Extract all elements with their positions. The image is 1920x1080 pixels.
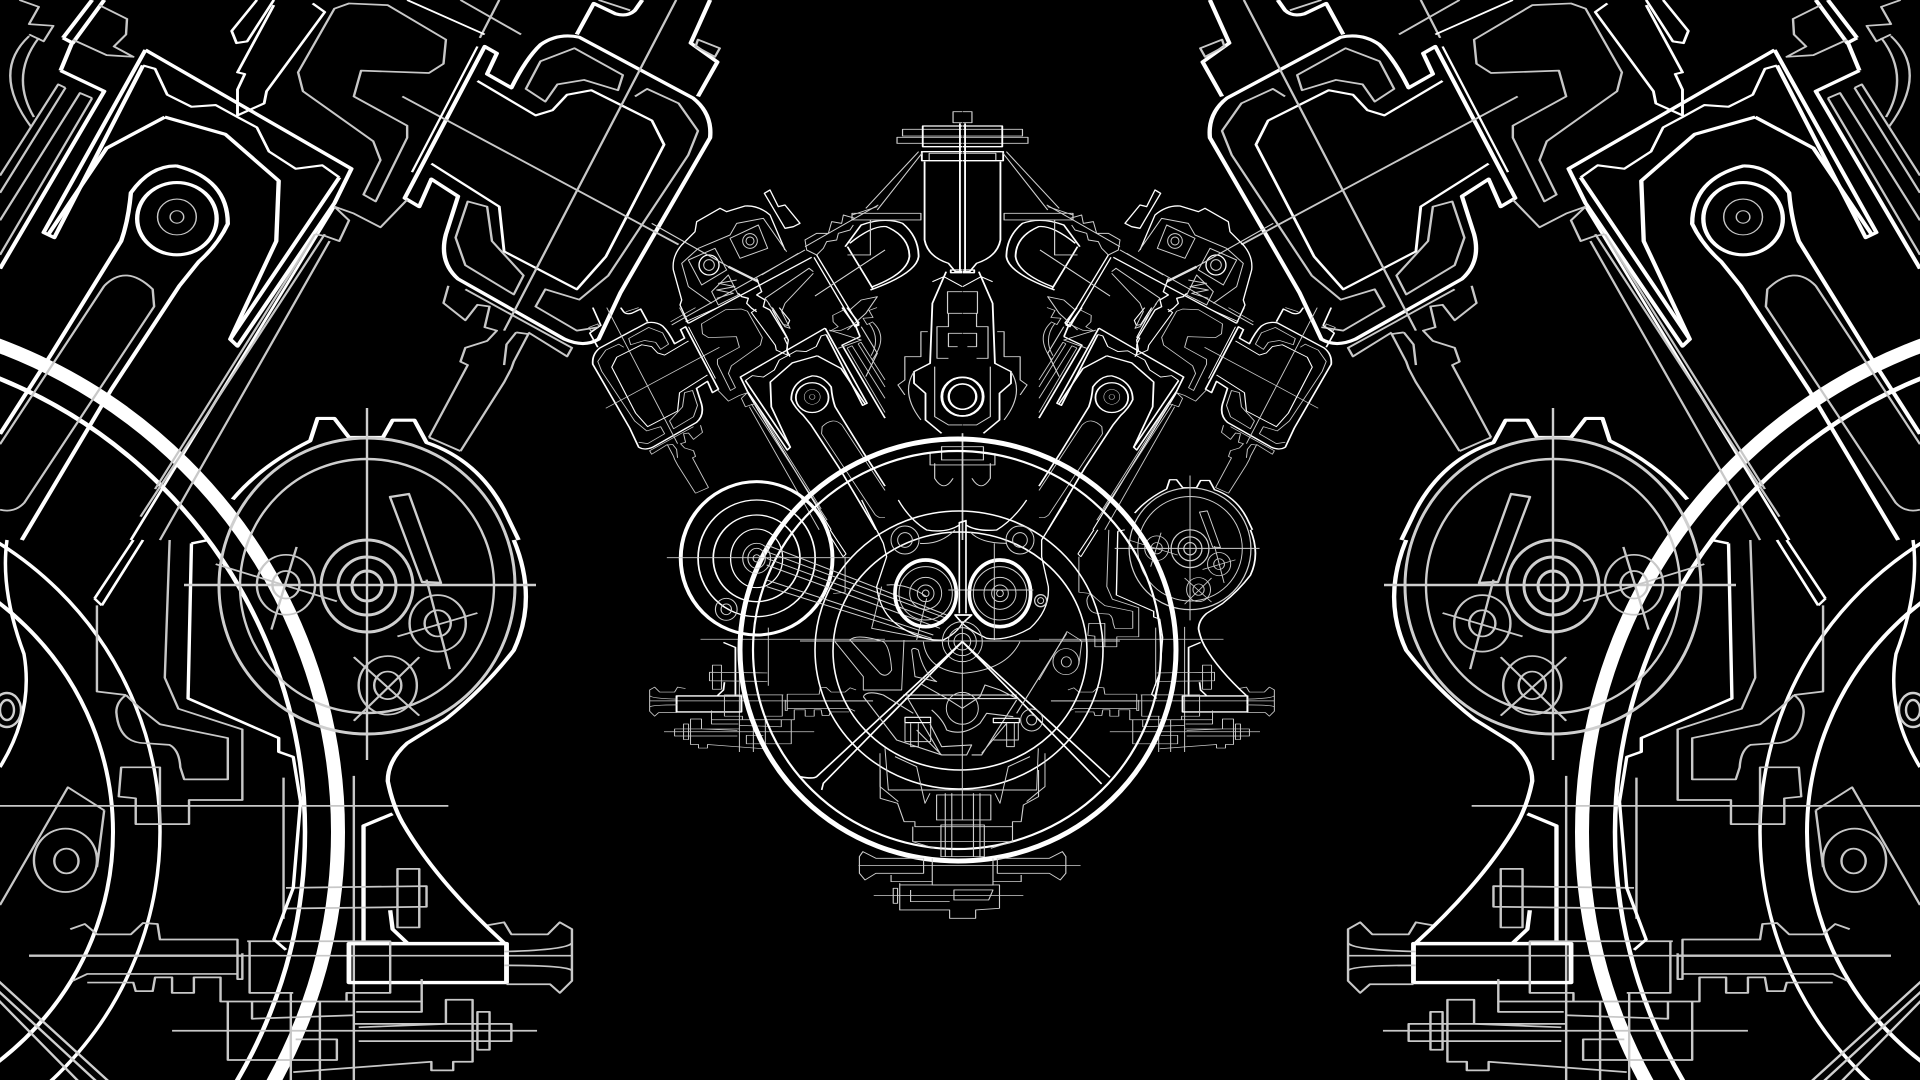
head inner chamber: [431, 81, 664, 289]
crankcase bottom: [880, 770, 1039, 857]
piston crown: [48, 117, 279, 339]
pulley: [667, 482, 850, 635]
main gear rings: [184, 408, 536, 760]
lifter cross lines: [963, 277, 993, 287]
center lines: [800, 623, 1120, 820]
twin cams: [895, 543, 1033, 640]
head jackets: [456, 48, 698, 331]
column cap: [963, 112, 1028, 161]
sump outlines: [880, 748, 1045, 803]
right enlarged engine view: [1200, 0, 1920, 1080]
center web: [955, 521, 972, 623]
lower cross castings: [863, 633, 1067, 755]
port line: [1040, 250, 1110, 296]
column body: [963, 123, 1000, 272]
left inner casting: [835, 637, 937, 690]
inner port casting: [298, 3, 446, 201]
valley loop: [1006, 220, 1080, 290]
column and valley: [942, 112, 1096, 540]
central upper structure left side: [652, 112, 983, 540]
foot box: [349, 944, 507, 983]
cylinder block and liner: [44, 50, 351, 346]
connecting rod: [0, 166, 228, 540]
flange end: [485, 922, 572, 993]
valve axes: [1113, 257, 1237, 323]
rod eye: [137, 183, 217, 255]
crank rings of enlarged view: [0, 312, 338, 1080]
cap circle: [946, 692, 978, 724]
valve spring: [1188, 280, 1208, 298]
central engine right half: [1039, 308, 1335, 752]
lower right bearing: [1021, 709, 1043, 731]
inner cover: [1138, 218, 1243, 303]
valvetrain: [1040, 190, 1273, 357]
wedge with bearing: [0, 787, 104, 905]
gear housing: [233, 418, 519, 540]
central crank rings: [740, 439, 1176, 861]
bottom flange: [859, 852, 1081, 885]
stepped spine: [1135, 278, 1187, 357]
jagged bolts: [1047, 205, 1120, 255]
rod end band: [95, 540, 143, 605]
long lower liner: [131, 207, 334, 540]
idlers: [891, 526, 1047, 607]
crankcase side casting: [188, 540, 301, 950]
lower bolt assembly: [228, 869, 511, 1072]
inner flange: [70, 923, 422, 1001]
cylinder head and top structure: [0, 0, 720, 540]
bracket strip: [1125, 190, 1161, 228]
cylinder side details: [1048, 297, 1096, 377]
side walls: [1066, 255, 1111, 327]
head center lines: [402, 0, 679, 331]
central upper structure right side: [942, 112, 1273, 540]
center bars: [903, 695, 1017, 699]
left enlarged engine view: [0, 0, 720, 1080]
lower neck: [963, 433, 995, 540]
pulley and crankcase bottom: [667, 482, 1081, 918]
cam housings: [1157, 225, 1237, 305]
bottom bolts: [874, 883, 1023, 918]
housing neck: [0, 540, 526, 950]
foot bracket: [364, 814, 407, 943]
timing belts: [767, 545, 947, 640]
head stud: [429, 286, 572, 451]
central engine left half: [589, 308, 885, 752]
central core: [767, 500, 1120, 820]
lever: [390, 494, 441, 583]
engine parts: [0, 0, 720, 1080]
cams: [1168, 234, 1182, 248]
bright axis: [1167, 267, 1197, 282]
cam cover: [1140, 206, 1252, 323]
center lines: [0, 605, 572, 1080]
lower bearing blocks: [905, 717, 1019, 723]
liner left details: [0, 0, 104, 269]
injector ring: [942, 377, 983, 416]
injector housing: [963, 270, 1011, 433]
rod slot: [0, 275, 154, 511]
inner port: [1112, 268, 1160, 328]
rocker cover: [577, 0, 717, 96]
shared half of the engine: [0, 0, 720, 1080]
crank journal: [923, 622, 1020, 673]
spokes: [800, 642, 1110, 790]
gear unit on the outer side: [0, 408, 536, 950]
secondary gears: [216, 547, 477, 721]
lower foot and bearing cap: [0, 540, 572, 1080]
rods and lobes: [862, 500, 1067, 640]
head outer casting: [405, 36, 710, 344]
